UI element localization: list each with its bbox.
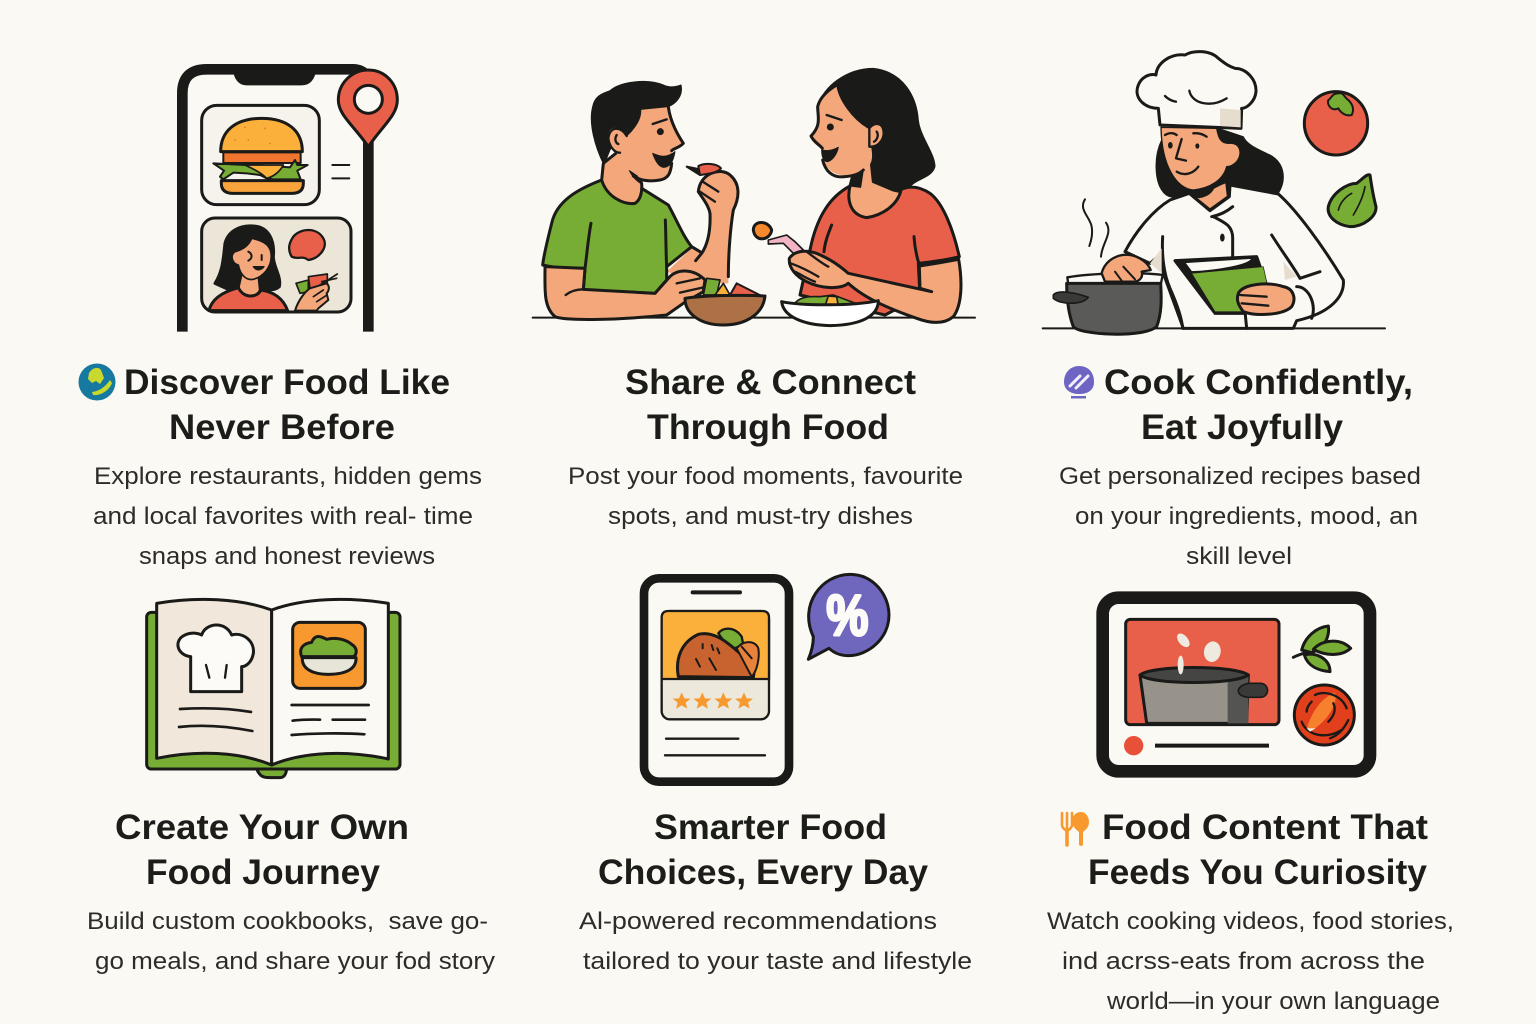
heading: food journey: Create Your Own (115, 808, 409, 847)
heading: smarter choices: Choices, Every Day (598, 853, 929, 892)
panel: food journey (87, 599, 496, 975)
food image (677, 629, 759, 678)
text: food journey description (87, 908, 496, 975)
text: cook confidently description: skill level (1186, 543, 1292, 570)
four stars (673, 692, 753, 709)
heading: smarter choices: Smarter Food (654, 808, 887, 847)
illustration: phone with burger and map pin (182, 69, 397, 332)
text: cook confidently description: Get personalized recipes based (1059, 463, 1421, 490)
heading: discover food: Discover Food Like (124, 363, 450, 402)
pot (1053, 199, 1163, 334)
illustration: cooking video player (1103, 598, 1370, 771)
icon: fork and spoon (1062, 812, 1089, 846)
text: share and connect description (568, 463, 963, 530)
text: smarter choices description (579, 908, 972, 975)
play button and progress bar (1124, 736, 1269, 755)
heading: discover food (124, 363, 450, 447)
panel: food content (1047, 598, 1454, 1015)
chef body (1125, 185, 1343, 328)
text: discover food description (93, 463, 482, 570)
chef hat (1137, 52, 1256, 128)
heading: cook confidently: Cook Confidently, (1104, 363, 1413, 402)
tomato slice (1294, 685, 1354, 745)
heading: food content: Feeds You Curiosity (1088, 853, 1428, 892)
icon: purple badge (1064, 366, 1094, 398)
heading: food journey (115, 808, 409, 892)
green leaf (1328, 175, 1376, 227)
text: cook confidently description (1059, 463, 1421, 570)
text: food journey description: go meals, and share your fod story (95, 948, 496, 975)
discount bubble (808, 574, 889, 659)
pot (1140, 631, 1267, 723)
heading: food content: Food Content That (1102, 808, 1428, 847)
heading: cook confidently (1104, 363, 1413, 447)
text: discover food description: Explore restaurants, hidden gems (94, 463, 482, 490)
text: share and connect description: spots, and must-try dishes (608, 503, 913, 530)
recipe tablet (1175, 257, 1294, 314)
text: food content description: world—in your own language (1106, 988, 1440, 1015)
text: discover food description: and local favorites with real- time (93, 503, 473, 530)
heading: food content (1088, 808, 1428, 892)
panel: cook confidently (1043, 52, 1421, 570)
illustration: open cookbook (147, 599, 400, 778)
discount bubble: % (826, 584, 868, 648)
illustration: couple sharing a meal (533, 68, 975, 326)
panel: discover food (78, 69, 482, 570)
man's bowl (685, 295, 765, 325)
heading: share and connect: Through Food (647, 408, 889, 447)
icon: teal badge (78, 364, 116, 400)
text: food content description: ind acrss-eats from across the (1062, 948, 1425, 975)
woman's bowl (782, 295, 878, 326)
heading: discover food: Never Before (169, 408, 395, 447)
illustration: tablet review with discount bubble (644, 574, 889, 782)
chef hat drawing (178, 625, 253, 692)
text: smarter choices description: tailored to your taste and lifestyle (583, 948, 972, 975)
man (543, 81, 762, 319)
text: food content description (1047, 908, 1454, 1015)
illustration: chef cooking with recipe tablet (1043, 52, 1385, 334)
text: cook confidently description: on your ingredients, mood, an (1075, 503, 1418, 530)
salad picture (293, 622, 365, 688)
heading: smarter choices (598, 808, 929, 892)
heading: food journey: Food Journey (146, 853, 381, 892)
panel: share and connect (533, 68, 975, 530)
text: food content description: Watch cooking videos, food stories, (1047, 908, 1454, 935)
panel: smarter choices (579, 574, 972, 975)
herb leaves (1293, 626, 1351, 672)
text: share and connect description: Post your food moments, favourite (568, 463, 963, 490)
heading: share and connect: Share & Connect (625, 363, 916, 402)
heading: share and connect (625, 363, 916, 447)
woman (753, 68, 961, 322)
text: discover food description: snaps and honest reviews (139, 543, 435, 570)
text: food journey description: Build custom cookbooks, save go- (87, 908, 488, 935)
text: smarter choices description: Al-powered recommendations (579, 908, 937, 935)
heading: cook confidently: Eat Joyfully (1141, 408, 1344, 447)
tomato (1304, 92, 1368, 155)
